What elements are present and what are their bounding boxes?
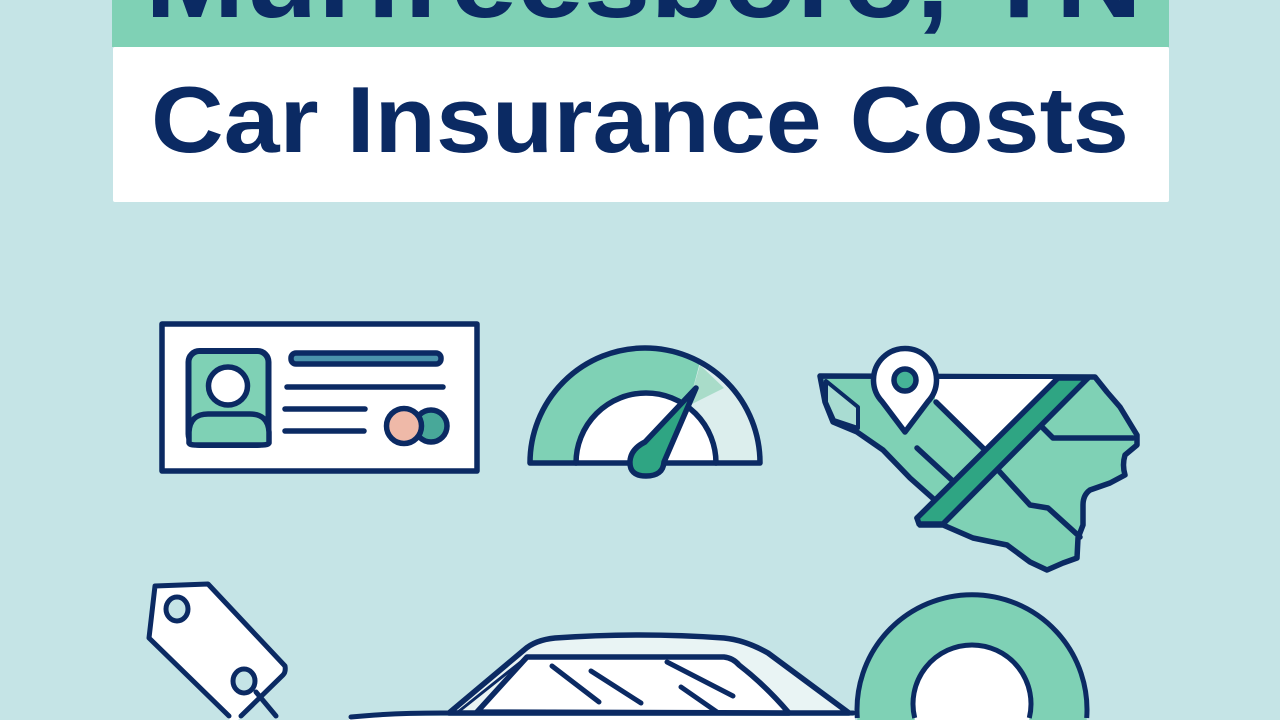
white map area (935, 379, 1058, 450)
title banner (112, 0, 1169, 202)
white subtitle band: Car Insurance Costs (151, 67, 1129, 172)
licence photo (188, 351, 269, 445)
white subtitle band (113, 47, 1169, 202)
icon: state map with pin (820, 348, 1137, 570)
gauge needle (630, 388, 696, 476)
map borders (917, 427, 1133, 537)
windscreen (477, 657, 789, 713)
icon: car (349, 635, 855, 720)
icon: driver licence card (162, 324, 477, 471)
road diagonal (917, 378, 1088, 524)
windscreen glare (552, 662, 733, 712)
left map section (826, 381, 858, 428)
licence text lines (285, 353, 443, 431)
car body line (351, 713, 853, 717)
icon: speedometer gauge (530, 348, 760, 476)
map pin (874, 348, 936, 432)
licence seal circles (386, 408, 447, 444)
car roof (449, 635, 849, 713)
icon: price tag (149, 584, 285, 720)
icon: car wheel (857, 595, 1087, 720)
